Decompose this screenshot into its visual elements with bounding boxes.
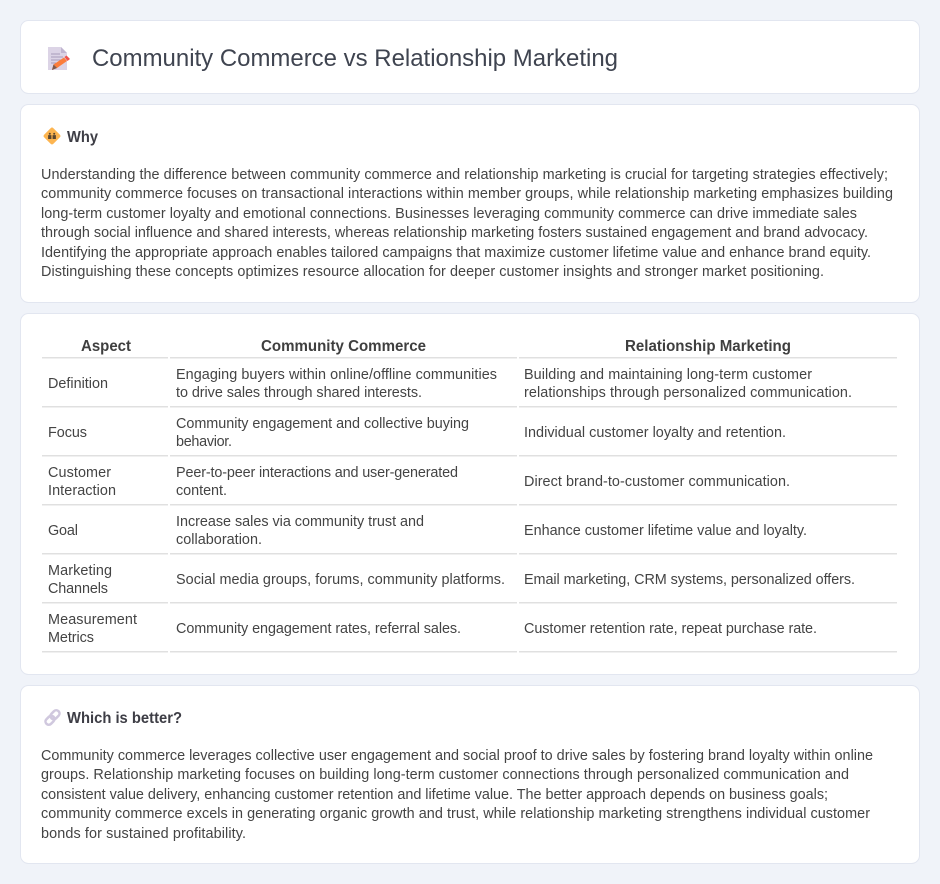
panel: comparison table: [20, 314, 920, 674]
row: customer interaction: Direct brand-to-customer communication.: [524, 474, 790, 490]
row: customer interaction: Customer: [48, 465, 111, 481]
row: goal: Goal: [48, 523, 78, 539]
row: definition: to drive sales through shared interests.: [176, 385, 422, 401]
which is better paragraph: bonds for sustained profitability.: [41, 826, 246, 842]
why paragraph: community commerce focuses on transactional interactions within member groups, while relationship marketing emphasizes building: [41, 186, 893, 202]
row: marketing channels: [48, 563, 855, 597]
why paragraph: Distinguishing these concepts optimizes resource allocation for deeper customer insights and stronger market positioning.: [41, 264, 824, 280]
which is better paragraph: [41, 748, 873, 842]
row: measurement metrics: [48, 612, 817, 646]
row: focus: Individual customer loyalty and retention.: [524, 425, 786, 441]
row: focus: behavior.: [176, 434, 232, 450]
row: measurement metrics: Metrics: [48, 630, 94, 646]
row: focus: Focus: [48, 425, 87, 441]
which is better paragraph: consistent value delivery, enhancing customer retention and lifetime value. The better approach depends on business goals;: [41, 787, 828, 803]
icon: chain link: [44, 709, 61, 726]
row: customer interaction: [48, 465, 790, 499]
row: marketing channels: Email marketing, CRM systems, personalized offers.: [524, 572, 855, 588]
which is better paragraph: Community commerce leverages collective user engagement and social proof to drive sales by fostering brand loyalty within online: [41, 748, 873, 764]
icon: document with pencil: [48, 47, 70, 70]
why paragraph: Understanding the difference between community commerce and relationship marketing is crucial for targeting strategies effectively;: [41, 167, 888, 183]
row: goal: Increase sales via community trust and: [176, 514, 424, 530]
row: measurement metrics: Measurement: [48, 612, 137, 628]
which is better paragraph: community commerce excels in generating organic growth and trust, while relationship marketing strengthens individual customer: [41, 806, 870, 822]
row: definition: Engaging buyers within online/offline communities: [176, 367, 497, 383]
why paragraph: long-term customer loyalty and emotional connections. Businesses leveraging community commerce can drive immediate sales: [41, 206, 857, 222]
panel: title header: [20, 20, 920, 94]
panel: why: [20, 104, 920, 302]
table header row: Community Commerce: [261, 338, 426, 355]
row: marketing channels: Channels: [48, 581, 108, 597]
heading: why: Why: [67, 129, 98, 146]
heading: which is better: Which is better?: [67, 710, 182, 727]
row: customer interaction: content.: [176, 483, 227, 499]
row: goal: [48, 514, 807, 548]
row: marketing channels: Marketing: [48, 563, 112, 579]
row: definition: Building and maintaining long-term customer: [524, 367, 812, 383]
row: definition: [48, 367, 852, 401]
row: customer interaction: Peer-to-peer interactions and user-generated: [176, 465, 458, 481]
row: measurement metrics: Customer retention rate, repeat purchase rate.: [524, 621, 817, 637]
row: goal: Enhance customer lifetime value and loyalty.: [524, 523, 807, 539]
title: Community Commerce vs Relationship Marketing: [92, 45, 618, 72]
why paragraph: through social influence and shared interests, whereas relationship marketing fosters sustained engagement and brand advocacy.: [41, 225, 868, 241]
row: goal: collaboration.: [176, 532, 262, 548]
row: focus: Community engagement and collective buying: [176, 416, 469, 432]
which is better paragraph: groups. Relationship marketing focuses on building long-term customer connections through personalized communication and: [41, 767, 849, 783]
table header row: Aspect: [81, 338, 132, 355]
row: measurement metrics: Community engagement rates, referral sales.: [176, 621, 461, 637]
row: definition: relationships through personalized communication.: [524, 385, 852, 401]
panel: which is better: [20, 686, 920, 864]
row: definition: Definition: [48, 376, 108, 392]
row: focus: [48, 416, 786, 450]
table header row: [81, 338, 791, 355]
icon: warning diamond: [43, 127, 61, 145]
why paragraph: [41, 167, 893, 280]
row: customer interaction: Interaction: [48, 483, 116, 499]
why paragraph: Identifying the appropriate approach enables tailored campaigns that maximize customer lifetime value and enhance brand equity.: [41, 245, 871, 261]
row: marketing channels: Social media groups, forums, community platforms.: [176, 572, 505, 588]
table header row: Relationship Marketing: [625, 338, 791, 355]
